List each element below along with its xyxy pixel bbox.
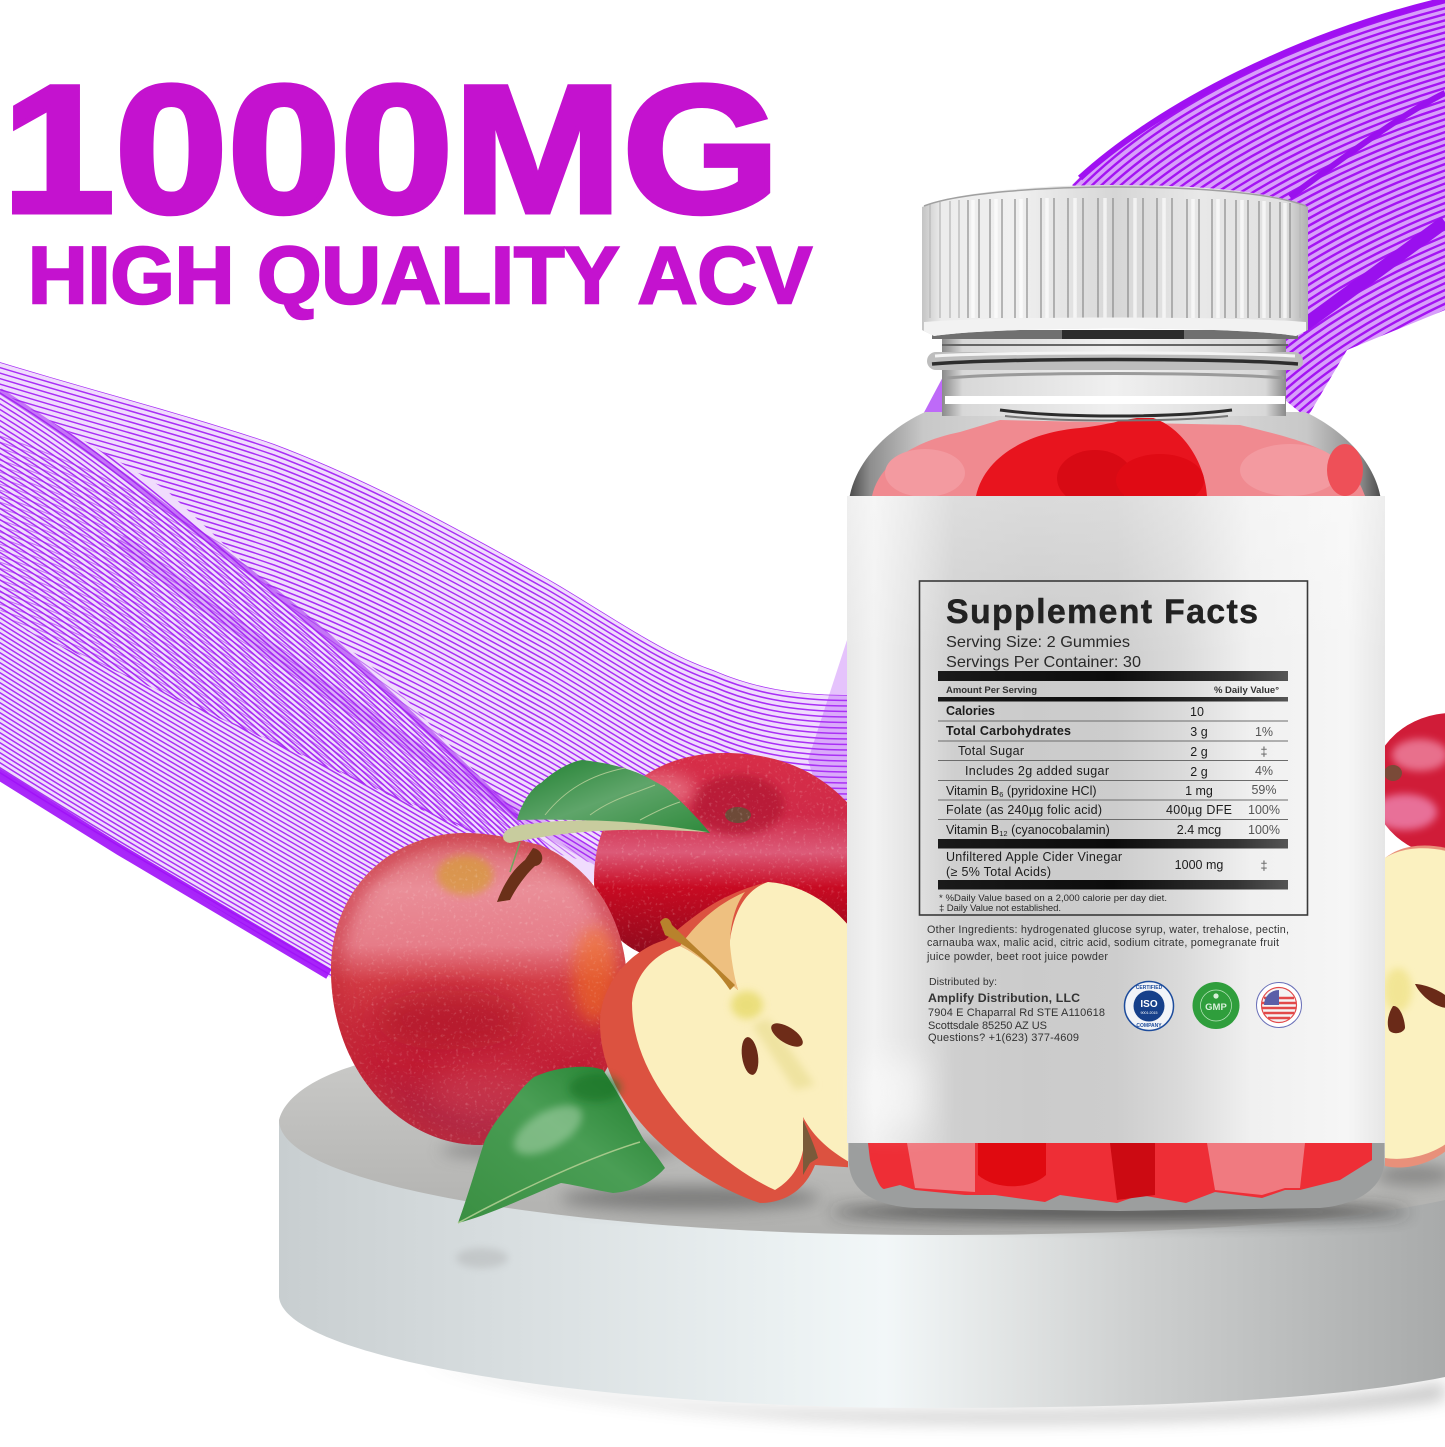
row: calories <box>946 704 1204 719</box>
row: apple cider vinegar: (≥ 5% Total Acids) <box>946 865 1051 879</box>
apple: front whole <box>328 830 630 1148</box>
bottle cap <box>922 185 1308 336</box>
row: total sugar: Total Sugar <box>958 744 1024 758</box>
row: calories: 10 <box>1190 705 1204 719</box>
serving info <box>946 634 1141 671</box>
title: 1000MG: 1000MG <box>2 47 780 251</box>
bottle <box>847 185 1385 1211</box>
gummies: top window <box>872 418 1365 496</box>
column header: % Daily Value° <box>1214 685 1279 696</box>
platform top <box>279 1064 1445 1235</box>
row: added sugar: Includes 2g added sugar <box>965 764 1109 778</box>
display platform <box>279 1064 1445 1423</box>
text: distributor <box>928 976 1105 1044</box>
apple: right side, cut half <box>1384 846 1445 1168</box>
icon: ISO badge <box>1124 982 1174 1030</box>
row: folate <box>946 803 1280 817</box>
row: total sugar <box>958 744 1268 759</box>
row: total sugar: ‡ <box>1261 745 1268 759</box>
row: folate: 100% <box>1248 803 1280 817</box>
text: distributor: Scottsdale 85250 AZ US <box>928 1020 1047 1032</box>
apple: cut half <box>600 882 860 1203</box>
row: vitamin B6: (pyridoxine HCl) <box>1003 784 1097 798</box>
icon: GMP badge: GMP <box>1205 1002 1227 1013</box>
row: vitamin B6: 1 mg <box>1185 784 1213 798</box>
icon: ISO badge: COMPANY <box>1136 1023 1162 1029</box>
heading: supplement facts: Supplement Facts <box>946 593 1258 631</box>
purple wave: top right <box>920 0 1445 515</box>
text: distributor: Distributed by: <box>929 976 997 988</box>
icon: ISO badge: ISO <box>1140 999 1158 1010</box>
row: vitamin B12: (cyanocobalamin) <box>1008 823 1110 837</box>
row: vitamin B6: Vitamin B <box>946 784 999 798</box>
apple group: left of bottle <box>328 750 880 1223</box>
panel frame <box>920 581 1308 915</box>
bottle label <box>847 496 1385 1143</box>
row dividers <box>938 721 1288 820</box>
purple wave: left ribbon <box>0 362 847 979</box>
icon: USA badge <box>1256 982 1302 1028</box>
icon: GMP badge <box>1192 982 1240 1029</box>
row: total sugar: 2 g <box>1190 745 1208 759</box>
row: added sugar <box>965 764 1273 779</box>
row: vitamin B12: Vitamin B <box>946 823 999 837</box>
leaf: top <box>503 760 710 872</box>
bottle base and gummies <box>849 1140 1384 1211</box>
footnotes: * %Daily Value based on a 2,000 calorie per day diet. <box>939 893 1167 904</box>
column header <box>946 685 1279 696</box>
row: vitamin B6 <box>946 783 1277 799</box>
row: vitamin B12: 12 <box>999 829 1008 838</box>
row: total carbohydrates: Total Carbohydrates <box>946 724 1071 738</box>
bottle neck <box>927 330 1303 420</box>
platform side <box>279 1120 1445 1408</box>
text: distributor: Amplify Distribution, LLC <box>928 991 1080 1005</box>
apple: right side, whole <box>1385 713 1445 848</box>
serving info: Servings Per Container: 30 <box>946 654 1141 671</box>
footnotes: ‡ Daily Value not established. <box>939 903 1061 914</box>
text: other ingredients <box>926 924 1289 963</box>
text: distributor: Questions? +1(623) 377-4609 <box>928 1032 1079 1044</box>
heavy bar second <box>938 697 1288 702</box>
apple: back whole <box>594 753 847 952</box>
text: other ingredients: juice powder, beet root juice powder <box>926 951 1108 963</box>
row: apple cider vinegar: ‡ <box>1261 859 1268 873</box>
row: apple cider vinegar: Unfiltered Apple Cider Vinegar <box>946 850 1122 864</box>
row: total carbohydrates <box>946 724 1273 739</box>
heavy bar top <box>938 671 1288 681</box>
row: vitamin B12: 100% <box>1248 823 1280 837</box>
row: total carbohydrates: 1% <box>1255 725 1273 739</box>
row: vitamin B6: 6 <box>999 790 1003 799</box>
heavy bar bottom <box>938 880 1288 890</box>
icon: ISO badge: 9001:2015 <box>1140 1011 1158 1015</box>
row: apple cider vinegar <box>946 850 1268 879</box>
heavy bar third <box>938 839 1288 848</box>
row: added sugar: 4% <box>1255 764 1273 778</box>
row: calories: Calories <box>946 704 995 718</box>
row: folate: Folate (as 240µg folic acid) <box>946 803 1102 817</box>
text: other ingredients: Other Ingredients: hydrogenated glucose syrup, water, trehalose, pectin, <box>927 924 1289 936</box>
platform drop shadow <box>420 1360 1445 1423</box>
row: folate: 400µg DFE <box>1166 803 1232 817</box>
label highlight <box>847 496 1385 1143</box>
row: vitamin B12: 2.4 mcg <box>1177 823 1221 837</box>
leaf: bottom <box>458 1067 665 1223</box>
text: other ingredients: carnauba wax, malic acid, citric acid, sodium citrate, pomegranate fruit <box>927 937 1279 949</box>
row: vitamin B6: 59% <box>1251 783 1277 797</box>
text: distributor: 7904 E Chaparral Rd STE A110618 <box>928 1007 1105 1019</box>
bottle glass shoulder <box>849 412 1381 500</box>
serving info: Serving Size: 2 Gummies <box>946 634 1130 651</box>
icon: ISO badge: CERTIFIED <box>1136 985 1163 991</box>
row: added sugar: 2 g <box>1190 765 1208 779</box>
row: apple cider vinegar: 1000 mg <box>1175 858 1223 872</box>
panel: supplement facts <box>920 581 1308 915</box>
subtitle: high quality ACV: HIGH QUALITY ACV <box>28 231 812 321</box>
column header: Amount Per Serving <box>946 685 1037 696</box>
row: total carbohydrates: 3 g <box>1190 725 1208 739</box>
row: vitamin B12 <box>946 823 1280 838</box>
footnotes <box>939 893 1167 914</box>
